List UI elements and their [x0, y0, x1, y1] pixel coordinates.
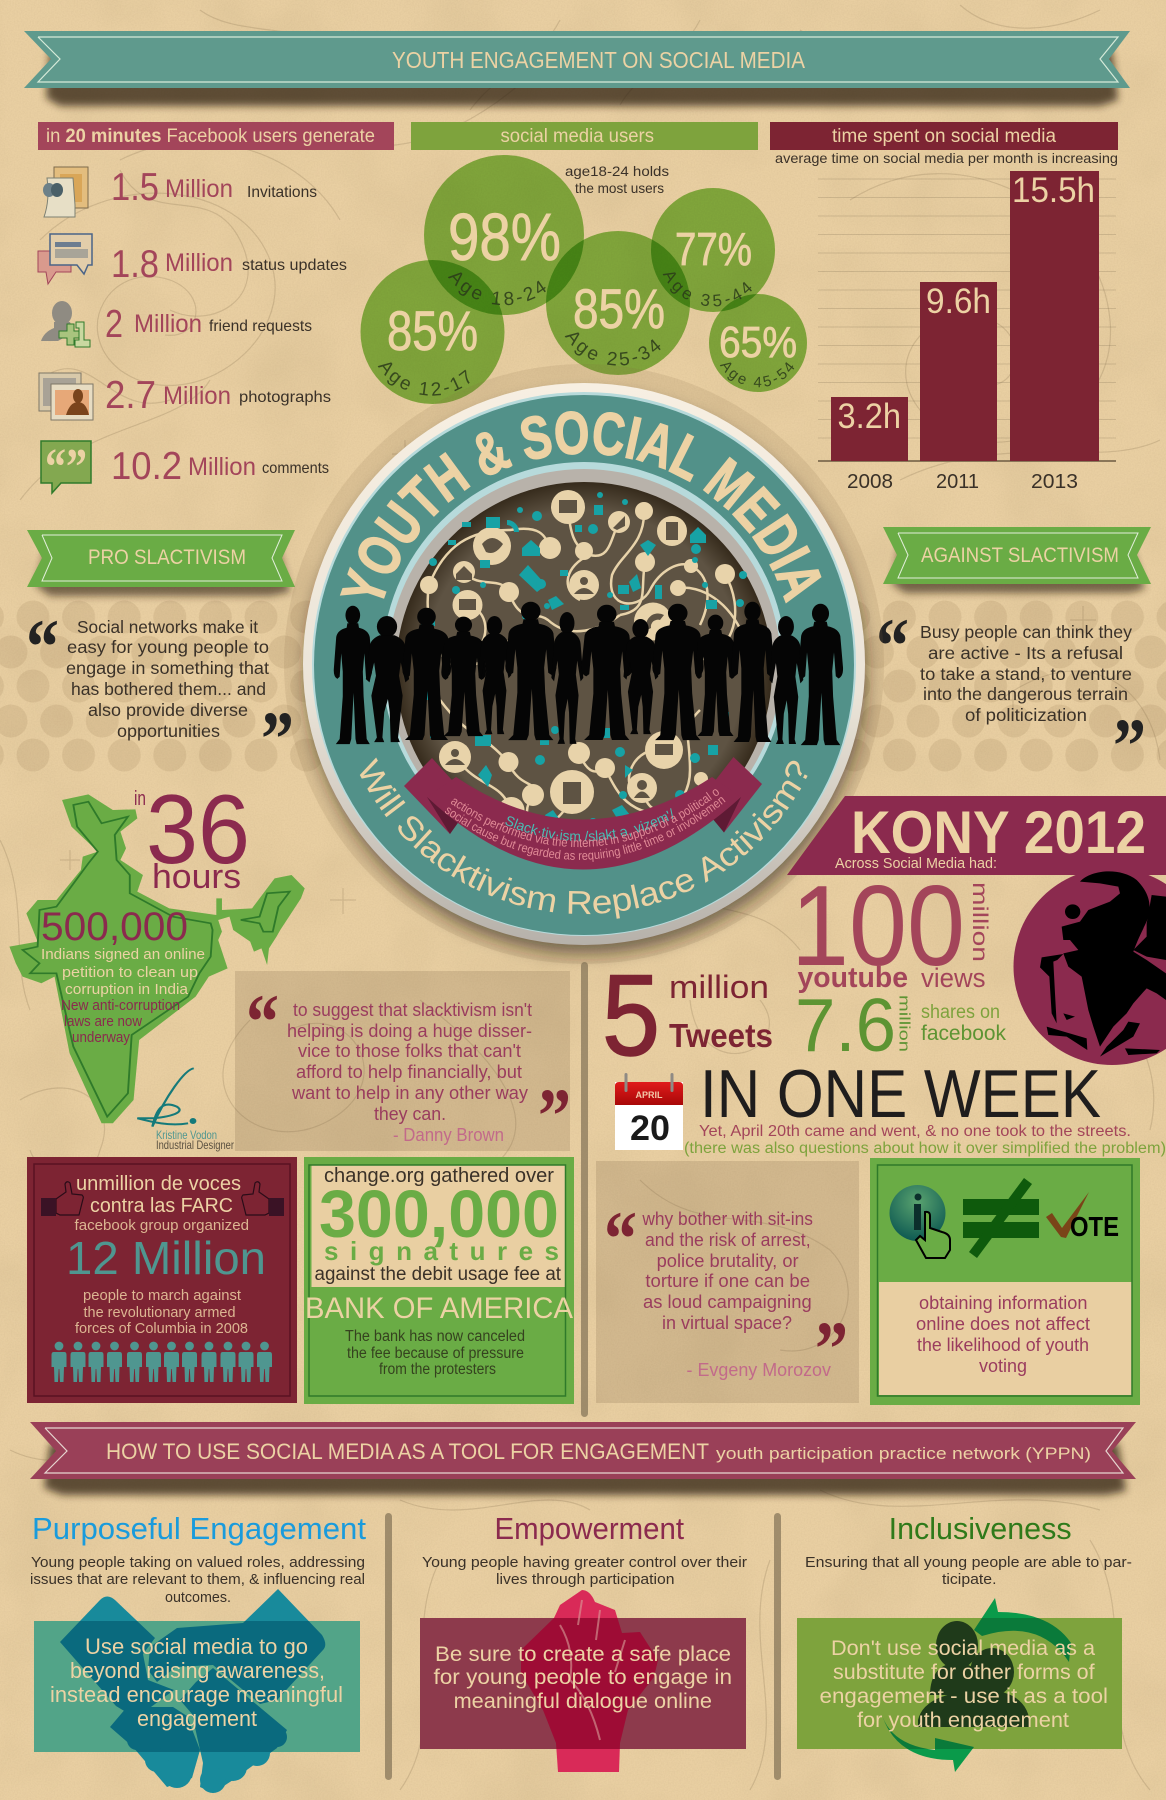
panel: information does not equal vote: the likelihood of youth — [917, 1335, 1089, 1355]
bubble: 85% age 12-17: Age 12-17 — [378, 362, 470, 396]
bubble: 98% age 18-24 — [448, 200, 561, 306]
kony stats — [602, 863, 1166, 1157]
quote: pro slactivism — [26, 603, 294, 782]
stat: 10.2 million comments: Million — [188, 453, 256, 481]
panel: farc facebook group: unmillion de voces — [76, 1173, 241, 1195]
group silhouette of young people — [334, 602, 843, 745]
stat: 7.6 million shares on facebook: million — [896, 995, 912, 1052]
social network illustration — [420, 490, 747, 827]
caption: age 18-24 holds the most users: the most users — [575, 180, 664, 196]
panel: information does not equal vote — [870, 1158, 1140, 1405]
stat: 2.7 million photographs: photographs — [239, 389, 331, 406]
quote: danny brown: afford to help financially, but — [296, 1062, 522, 1082]
column: inclusiveness: Ensuring that all young people are able to par- — [805, 1554, 1132, 1571]
badge title: youth and social media: YOUTH & SOCIAL MEDIA — [340, 411, 822, 604]
quote: danny brown: vice to those folks that can't — [298, 1041, 521, 1061]
quote: against slactivism: to take a stand, to venture — [920, 664, 1132, 684]
quote: against slactivism: ” — [1113, 702, 1146, 789]
stat: 7.6 million shares on facebook — [795, 983, 1006, 1067]
stat: 7.6 million shares on facebook: shares on — [921, 1002, 1000, 1023]
definition ribbon: social cause but regarded as requiring little time or involvement — [445, 797, 726, 862]
panel: farc facebook group: people to march against — [83, 1287, 242, 1304]
header: social media users: social media users — [500, 126, 654, 147]
column: empowerment: lives through participation — [496, 1571, 674, 1588]
top title banner — [24, 31, 1130, 106]
bar 2011: 2011 — [936, 471, 979, 493]
panel: change.org bank of america: change.org gathered over — [324, 1165, 554, 1187]
quote: against slactivism: into the dangerous terrain — [923, 684, 1128, 704]
petition description — [41, 946, 205, 1046]
panel: information does not equal vote: voting — [979, 1356, 1027, 1376]
panel: farc facebook group: facebook group organized — [74, 1217, 249, 1234]
panel: farc facebook group: forces of Columbia in 2008 — [75, 1320, 248, 1337]
header: time spent on social media — [770, 122, 1118, 150]
icon: calendar april 20 — [615, 1073, 683, 1150]
engagement section banner — [30, 1422, 1136, 1495]
bubble: 98% age 18-24: Age 18-24 — [448, 272, 546, 306]
caption: average time: average time on social media per month is increasing — [775, 150, 1118, 166]
stat: 1.5 million invitations: Million — [165, 175, 233, 203]
icon: info cursor — [890, 1185, 950, 1258]
note: april 20th: Yet, April 20th came and went, & no one took to the streets. — [699, 1123, 1131, 1140]
kony 2012 banner: Across Social Media had: — [835, 855, 997, 872]
column: empowerment: Empowerment — [494, 1511, 684, 1546]
column: purposeful engagement: Use social media to go — [85, 1634, 308, 1659]
column: inclusiveness: engagement - use it as a tool — [820, 1684, 1108, 1708]
quote: evgeny morozov: in virtual space? — [662, 1313, 792, 1333]
bubble: 65% age 45-54 — [719, 318, 797, 388]
panel: change.org bank of america: the fee because of pressure — [347, 1345, 524, 1362]
quote: danny brown: helping is doing a huge disser- — [287, 1021, 532, 1041]
heading: in one week: IN ONE WEEK — [700, 1056, 1101, 1132]
column: empowerment: for young people to engage in — [434, 1665, 732, 1689]
quote: evgeny morozov: why bother with sit-ins — [641, 1209, 813, 1229]
quote: pro slactivism: opportunities — [117, 721, 220, 741]
stat: 7.6 million shares on facebook: facebook — [921, 1022, 1006, 1045]
quote: danny brown: to suggest that slacktivism isn't — [293, 1000, 532, 1020]
icon: raised fist — [521, 1590, 658, 1772]
bubble chart: social media users by age — [360, 155, 807, 404]
icon: handshake — [60, 1589, 325, 1793]
column: inclusiveness: Don't use social media as a — [831, 1636, 1095, 1660]
quote: evgeny morozov: police brutality, or — [657, 1251, 799, 1271]
icon: friend request — [41, 301, 90, 347]
panel: change.org bank of america: against the debit usage fee at — [314, 1264, 562, 1285]
icon: photographs — [39, 373, 93, 420]
panel: change.org bank of america: signatures — [324, 1236, 559, 1266]
bubble: 65% age 45-54: Age 45-54 — [720, 362, 794, 388]
bar 2013: 2013 — [1031, 471, 1078, 493]
icon: recycle arrows and people — [881, 1598, 1071, 1772]
panel: change.org bank of america — [304, 1157, 574, 1404]
bar chart: time spent on social media — [775, 150, 1118, 493]
panel: change.org bank of america: The bank has now canceled — [345, 1328, 525, 1345]
bar 2013 — [1010, 171, 1099, 493]
icon: not equal — [963, 1178, 1039, 1258]
quote: evgeny morozov: and the risk of arrest, — [645, 1230, 811, 1250]
bubble: 85% age 12-17 — [378, 299, 478, 396]
column: inclusiveness: ticipate. — [942, 1571, 996, 1588]
panel: farc facebook group: contra las FARC — [90, 1195, 233, 1217]
column: inclusiveness: Inclusiveness — [889, 1511, 1072, 1546]
bar 2011 — [920, 282, 997, 493]
stat: 1.8 million status updates: Million — [165, 249, 233, 277]
stat: 1.8 million status updates: 1.8 — [111, 243, 159, 286]
bubble: 77% age 35-44 — [662, 223, 752, 306]
headline: in 36 hours: hours — [152, 858, 241, 896]
header: social media users — [411, 122, 758, 150]
designer signature: Industrial Designer — [156, 1138, 234, 1152]
column: inclusiveness: for youth engagement — [857, 1708, 1069, 1732]
stat: 2 million friend requests: Million — [134, 310, 202, 338]
bubble: 85% age 25-34 — [564, 277, 665, 366]
engagement section banner: HOW TO USE SOCIAL MEDIA AS A TOOL FOR ENGAGEMENT — [106, 1439, 709, 1464]
badge subtitle: will slacktivism replace activism: Will Slacktivism Replace Activism? — [360, 758, 808, 919]
icon: thumbs up right — [242, 1182, 284, 1216]
quote: pro slactivism: ” — [261, 695, 294, 782]
petition description: corruption in India — [65, 981, 189, 998]
against slactivism banner — [883, 527, 1151, 593]
caption: age 18-24 holds the most users — [565, 163, 669, 196]
quote: evgeny morozov — [596, 1161, 859, 1403]
quote: pro slactivism: also provide diverse — [88, 700, 248, 720]
quote: pro slactivism: Social networks make it — [77, 617, 258, 637]
top title banner: YOUTH ENGAGEMENT ON SOCIAL MEDIA — [392, 47, 806, 73]
quote: evgeny morozov: “ — [604, 1195, 637, 1282]
designer signature: Kristine Vodon — [156, 1128, 217, 1142]
quote: against slactivism: Busy people can think they — [920, 622, 1132, 642]
bar 2008 — [831, 397, 908, 493]
stat: 5 million tweets: Tweets — [669, 1017, 773, 1054]
quote: danny brown: they can. — [374, 1104, 446, 1124]
quote: danny brown: ” — [538, 1072, 571, 1159]
stat: 2.7 million photographs — [105, 374, 331, 417]
against slactivism banner: AGAINST SLACTIVISM — [921, 544, 1119, 567]
column: empowerment: meaningful dialogue online — [454, 1689, 712, 1713]
petition description: New anti-corruption — [61, 997, 180, 1014]
stat: 2.7 million photographs: Million — [163, 382, 231, 410]
column: purposeful engagement: outcomes. — [165, 1589, 231, 1606]
panel: change.org bank of america: BANK OF AMERICA — [305, 1292, 573, 1325]
note: oversimplified: (there was also questions about how it over simplified the problem) — [684, 1140, 1166, 1157]
stat: 100 million youtube views: million — [968, 882, 991, 962]
column divider right — [774, 1513, 781, 1780]
column: inclusiveness — [797, 1511, 1132, 1772]
panel: farc facebook group: 12 Million — [66, 1232, 266, 1284]
column: purposeful engagement: beyond raising awareness, — [70, 1658, 325, 1683]
quote: pro slactivism: engage in something that — [66, 658, 269, 678]
india petition: map and text — [9, 774, 305, 1123]
panel: change.org bank of america: from the protesters — [379, 1361, 496, 1378]
stat: 2 million friend requests: friend requests — [209, 318, 312, 335]
icon: row of twelve people — [52, 1342, 272, 1382]
quote: danny brown: “ — [246, 978, 279, 1065]
bar 2008: 2008 — [847, 471, 893, 493]
quote: pro slactivism: has bothered them... and — [71, 679, 266, 699]
stat: 1.8 million status updates — [111, 243, 347, 286]
icon: calendar april 20: APRIL — [636, 1090, 663, 1100]
stat: 5 million tweets: 5 — [602, 952, 660, 1080]
stat: 1.5 million invitations: 1.5 — [111, 166, 159, 209]
column: purposeful engagement: Young people taking on valued roles, addressing — [31, 1554, 365, 1571]
definition ribbon — [404, 757, 762, 870]
dotted band behind the central badge — [0, 600, 1166, 772]
column: inclusiveness: substitute for other forms of — [833, 1660, 1095, 1684]
definition ribbon: actions performed via the internet in support of a political or — [451, 789, 719, 848]
panel: change.org bank of america: 300,000 — [319, 1177, 559, 1252]
stat: 10.2 million comments: comments — [262, 460, 329, 477]
petition description: underway — [72, 1029, 130, 1046]
panel: information does not equal vote: online does not affect — [916, 1314, 1090, 1334]
stat: 5 million tweets: million — [669, 969, 769, 1005]
quote: against slactivism: “ — [876, 602, 909, 689]
column: empowerment: Be sure to create a safe place — [435, 1642, 731, 1666]
stat: 100 million youtube views: youtube — [798, 962, 908, 994]
quote: pro slactivism: easy for young people to — [67, 637, 269, 657]
header: time spent on social media: time spent on social media — [832, 126, 1056, 147]
stats list — [38, 166, 347, 496]
headline: in 36 hours: in — [134, 788, 146, 810]
bar 2011: 9.6h — [926, 282, 991, 321]
kony portrait silhouette — [1040, 871, 1166, 1057]
column: empowerment: Young people having greater control over their — [422, 1554, 747, 1571]
bubble: 65% age 45-54: 65% — [719, 318, 797, 367]
kony 2012 banner — [787, 796, 1166, 1065]
quote: against slactivism: of politicization — [965, 705, 1087, 725]
stat: 2 million friend requests — [105, 303, 312, 346]
icon: status updates — [38, 234, 92, 284]
column divider left — [385, 1513, 392, 1780]
header: in 20 minutes: in 20 minutes Facebook users generate — [46, 126, 375, 147]
petition description: laws are now — [64, 1013, 142, 1030]
quote: danny brown: want to help in any other way — [291, 1083, 528, 1103]
stat: 100 million youtube views: 100 — [791, 863, 965, 990]
column: purposeful engagement: instead encourage meaningful — [50, 1682, 343, 1707]
quote: evgeny morozov: - Evgeny Morozov — [686, 1360, 831, 1380]
stat: 2.7 million photographs: 2.7 — [105, 374, 156, 417]
stat: 1.8 million status updates: status updates — [242, 257, 347, 274]
bubble: 85% age 25-34: Age 25-34 — [564, 332, 661, 366]
panel: information does not equal vote: obtaining information — [919, 1293, 1088, 1313]
icon: thumbs up left — [41, 1182, 83, 1216]
petition description: petition to clean up — [62, 964, 198, 981]
stat: 10.2 million comments: 10.2 — [111, 445, 182, 488]
engagement section banner: youth participation practice network (YPPN) — [716, 1444, 1091, 1463]
vertical divider — [581, 962, 588, 1417]
column: purposeful engagement: Purposeful Engagement — [32, 1511, 366, 1546]
column: purposeful engagement: issues that are relevant to them, & influencing real — [30, 1571, 365, 1588]
bar 2008: 3.2h — [838, 397, 901, 436]
panel: farc facebook group: the revolutionary armed — [84, 1304, 236, 1321]
quote: evgeny morozov: ” — [815, 1305, 848, 1392]
definition ribbon: Slack·tiv·ism /slakt ə, vizem'/ — [506, 808, 674, 842]
stat: 5 million tweets — [602, 952, 773, 1080]
bubble: 98% age 18-24: 98% — [448, 200, 561, 275]
map of india — [9, 794, 305, 1123]
bubble: 85% age 12-17: 85% — [387, 299, 478, 362]
quote: pro slactivism: “ — [26, 603, 59, 690]
column: purposeful engagement — [30, 1511, 366, 1793]
designer signature — [137, 1068, 234, 1152]
stat: 7.6 million shares on facebook: 7.6 — [795, 983, 896, 1067]
panel: farc facebook group — [27, 1157, 297, 1403]
bubble: 77% age 35-44: Age 35-44 — [662, 272, 752, 306]
quote: danny brown: - Danny Brown — [393, 1125, 504, 1145]
quote: evgeny morozov: as loud campaigning — [643, 1292, 812, 1312]
pro slactivism banner: PRO SLACTIVISM — [88, 546, 246, 569]
bar 2013: 15.5h — [1012, 171, 1095, 210]
icon: invitations — [43, 167, 88, 217]
petition description: Indians signed an online — [41, 946, 205, 963]
pro slactivism banner — [27, 530, 295, 596]
stat: 10.2 million comments — [111, 445, 329, 488]
icon: vote check — [1046, 1192, 1119, 1242]
stat: 1.5 million invitations — [111, 166, 317, 209]
icon: comments: “” — [45, 439, 87, 496]
bubble: 77% age 35-44: 77% — [675, 223, 752, 275]
headline: in 36 hours: 36 — [146, 774, 250, 884]
stat: 2 million friend requests: 2 — [105, 303, 123, 346]
stat: 1.5 million invitations: Invitations — [247, 184, 317, 201]
icon: calendar april 20: 20 — [630, 1109, 670, 1148]
caption: age 18-24 holds the most users: age18-24 holds — [565, 163, 669, 179]
quote: evgeny morozov: torture if one can be — [645, 1271, 810, 1291]
stat: 500,000: 500,000 — [41, 905, 188, 949]
icon: vote check: OTE — [1070, 1211, 1119, 1242]
quote: against slactivism — [876, 602, 1146, 789]
stat: 100 million youtube views: views — [921, 963, 986, 993]
kony 2012 banner: KONY 2012 — [851, 799, 1146, 866]
central badge — [284, 364, 884, 966]
bubble: 85% age 25-34: 85% — [573, 277, 665, 340]
quote: against slactivism: are active - Its a refusal — [928, 643, 1123, 663]
quote: danny brown — [235, 971, 571, 1159]
column: purposeful engagement: engagement — [137, 1706, 257, 1731]
column: empowerment — [420, 1511, 747, 1772]
